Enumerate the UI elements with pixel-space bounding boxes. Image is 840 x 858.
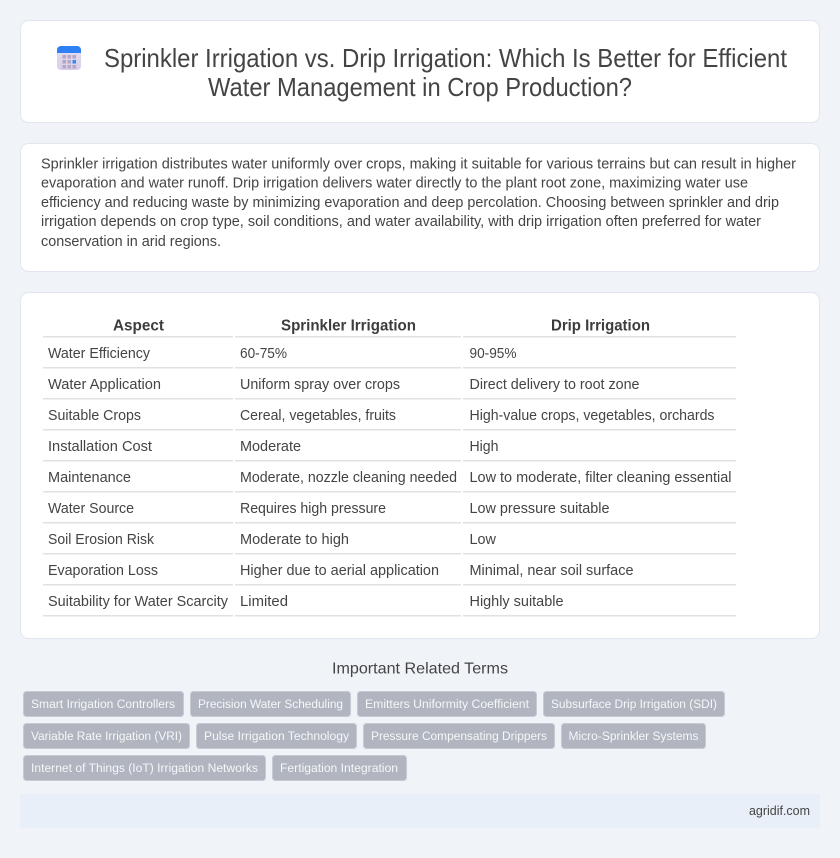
chip: Variable Rate Irrigation (VRI) bbox=[31, 729, 182, 743]
chip: Pulse Irrigation Technology bbox=[204, 729, 350, 743]
text block: introduction: irrigation depends on crop type, soil conditions, and water availability, with drip irrigation often preferred for water bbox=[41, 214, 761, 230]
table row: soil erosion risk: Low bbox=[470, 532, 497, 548]
chip bbox=[364, 724, 554, 748]
title bbox=[104, 45, 787, 102]
table row: installation cost bbox=[48, 439, 498, 455]
table row: maintenance: Moderate, nozzle cleaning needed bbox=[240, 470, 457, 486]
table row: water source: Water Source bbox=[48, 501, 134, 517]
table row: suitability for water scarcity: Limited bbox=[240, 594, 288, 610]
table row: water source: Low pressure suitable bbox=[470, 501, 610, 517]
text block: introduction: Sprinkler irrigation distributes water uniformly over crops, making it suitable for various terrains but can result in higher bbox=[41, 156, 796, 172]
table row: suitable crops: High-value crops, vegetables, orchards bbox=[470, 408, 714, 424]
chip bbox=[272, 756, 406, 780]
text block: introduction bbox=[41, 156, 796, 250]
table row: suitability for water scarcity: Suitability for Water Scarcity bbox=[48, 594, 229, 610]
chip: Micro-Sprinkler Systems bbox=[568, 729, 698, 743]
table row: installation cost: Installation Cost bbox=[48, 439, 152, 455]
title: Sprinkler Irrigation vs. Drip Irrigation: Which Is Better for Efficient bbox=[104, 45, 787, 73]
table header bbox=[113, 318, 650, 334]
text block: introduction: evaporation and water runoff. Drip irrigation delivers water directly to the plant root zone, maximizing water use bbox=[41, 176, 748, 192]
table row: suitability for water scarcity: Highly suitable bbox=[470, 594, 564, 610]
table row: maintenance bbox=[48, 470, 732, 486]
table row: maintenance: Low to moderate, filter cleaning essential bbox=[470, 470, 732, 486]
text block: introduction: efficiency and reducing waste by minimizing evaporation and deep percolation. Choosing between sprinkler and drip bbox=[41, 195, 779, 211]
chip bbox=[24, 692, 184, 716]
footer bbox=[20, 794, 820, 828]
table row: soil erosion risk bbox=[48, 532, 497, 548]
table row: water application: Water Application bbox=[48, 377, 161, 393]
table row: soil erosion risk: Soil Erosion Risk bbox=[48, 532, 155, 548]
chip: Smart Irrigation Controllers bbox=[31, 697, 175, 711]
chip: Subsurface Drip Irrigation (SDI) bbox=[551, 697, 717, 711]
table row: soil erosion risk: Moderate to high bbox=[240, 532, 349, 548]
related term chips bbox=[24, 692, 724, 780]
table row: installation cost: Moderate bbox=[240, 439, 301, 455]
table row: suitable crops bbox=[48, 408, 714, 424]
table row: suitability for water scarcity bbox=[48, 594, 564, 610]
table row: water source bbox=[48, 501, 610, 517]
chip bbox=[24, 724, 190, 748]
table row: water source: Requires high pressure bbox=[240, 501, 386, 517]
chip: Internet of Things (IoT) Irrigation Networks bbox=[31, 761, 258, 775]
title: Water Management in Crop Production? bbox=[208, 74, 632, 102]
table row: maintenance: Maintenance bbox=[48, 470, 131, 486]
heading: related terms: Important Related Terms bbox=[332, 660, 508, 678]
chip bbox=[562, 724, 706, 748]
table row: suitable crops: Suitable Crops bbox=[48, 408, 141, 424]
table header: Sprinkler Irrigation bbox=[281, 318, 416, 334]
chip: Emitters Uniformity Coefficient bbox=[365, 697, 530, 711]
table row: evaporation loss: Minimal, near soil surface bbox=[470, 563, 634, 579]
table row: water efficiency: 90-95% bbox=[470, 346, 517, 362]
table header: Aspect bbox=[113, 318, 164, 334]
chip: Pressure Compensating Drippers bbox=[371, 729, 547, 743]
table row: water application: Uniform spray over crops bbox=[240, 377, 400, 393]
table row: water application bbox=[48, 377, 640, 393]
table row: water efficiency: 60-75% bbox=[240, 346, 287, 362]
chip bbox=[196, 724, 356, 748]
chip bbox=[190, 692, 350, 716]
chip: Precision Water Scheduling bbox=[198, 697, 343, 711]
header panel bbox=[20, 20, 820, 122]
footer: agridif.com bbox=[749, 803, 810, 818]
table row: water efficiency bbox=[48, 346, 517, 362]
chip: Fertigation Integration bbox=[280, 761, 398, 775]
table row: evaporation loss: Higher due to aerial application bbox=[240, 563, 439, 579]
table row: installation cost: High bbox=[470, 439, 498, 455]
panel: comparison table bbox=[20, 292, 820, 638]
chip bbox=[358, 692, 536, 716]
table row: suitable crops: Cereal, vegetables, fruits bbox=[240, 408, 396, 424]
table row: water efficiency: Water Efficiency bbox=[48, 346, 151, 362]
panel: introduction bbox=[20, 144, 820, 272]
table row: evaporation loss bbox=[48, 563, 634, 579]
table header: Drip Irrigation bbox=[551, 318, 650, 334]
table row: evaporation loss: Evaporation Loss bbox=[48, 563, 158, 579]
table row: water application: Direct delivery to root zone bbox=[470, 377, 640, 393]
icon: calendar bbox=[57, 46, 81, 70]
chip bbox=[24, 756, 266, 780]
text block: introduction: conservation in arid regions. bbox=[41, 234, 221, 250]
chip bbox=[544, 692, 724, 716]
